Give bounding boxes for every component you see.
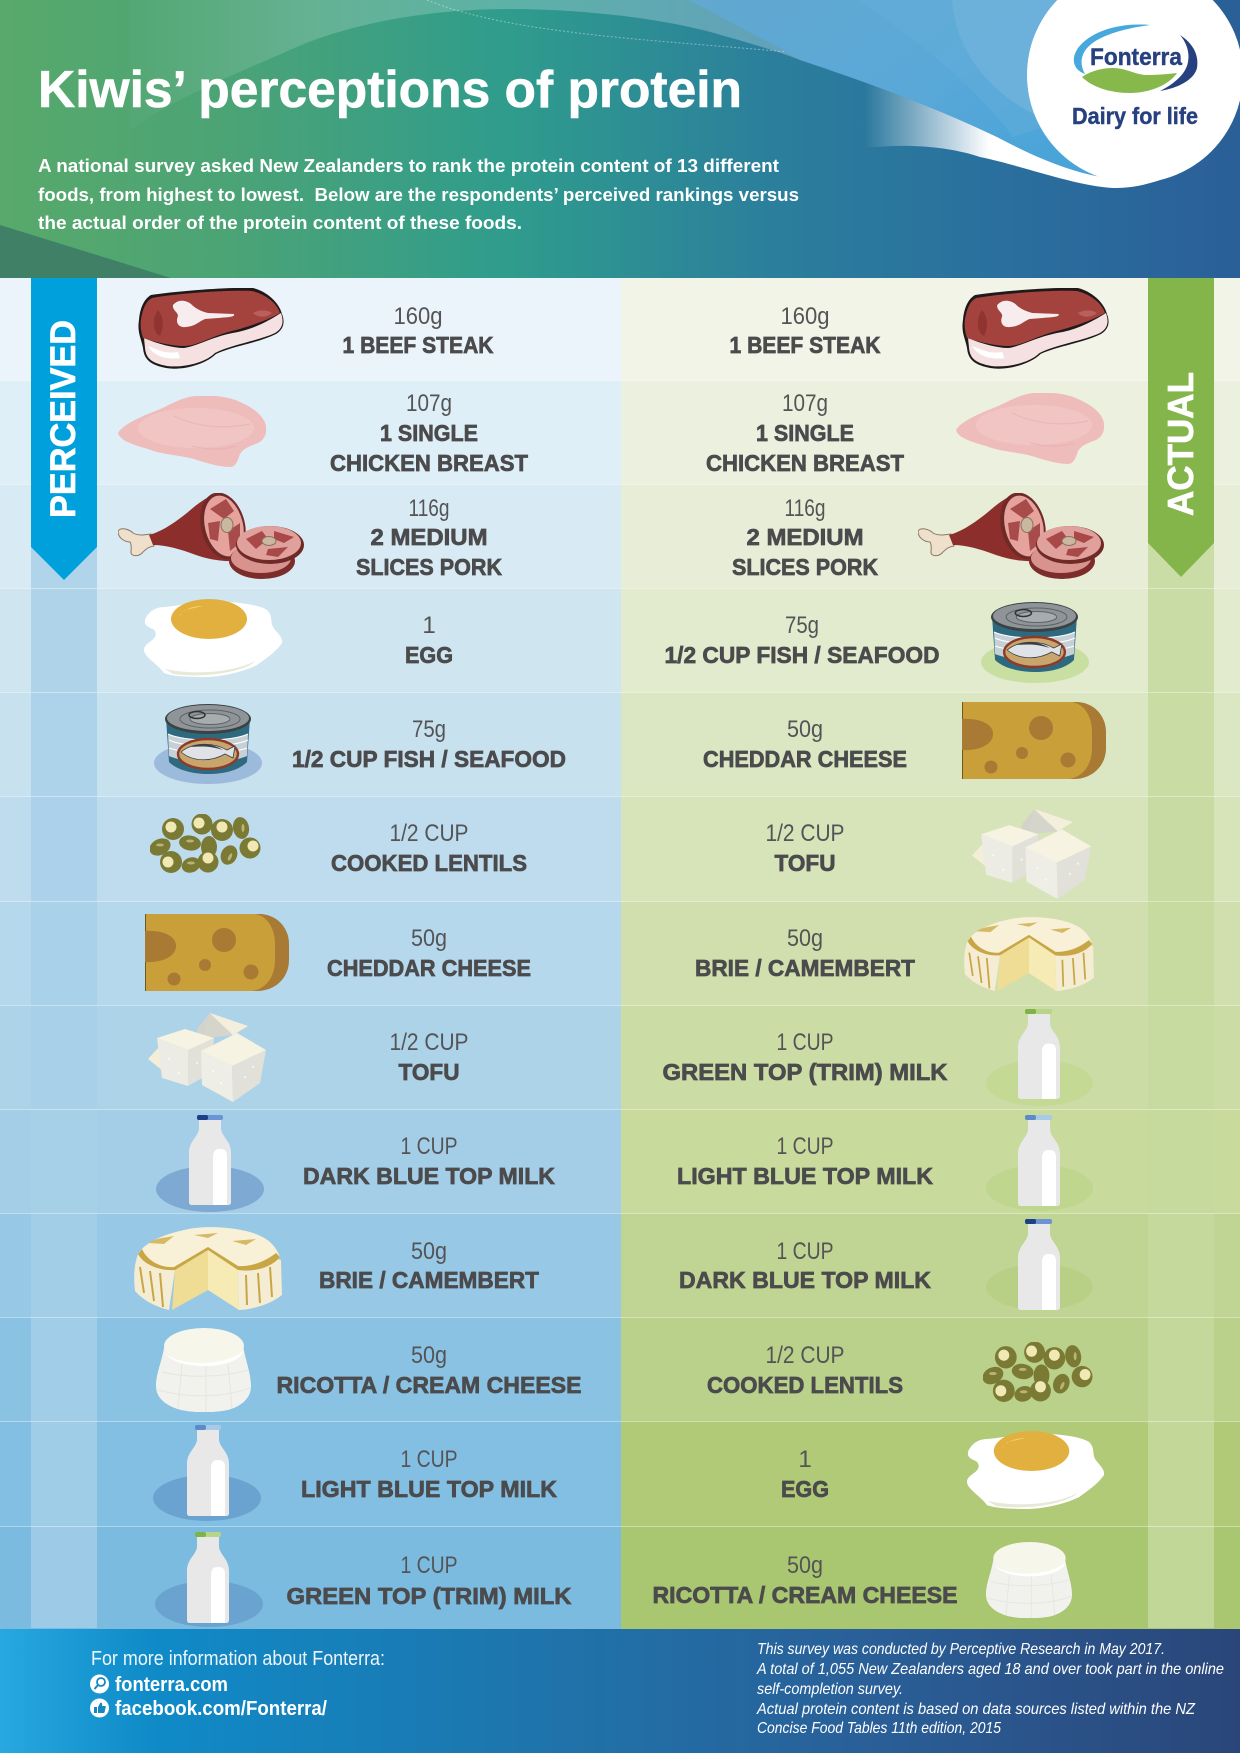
footer: survey notes: This survey was conducted by Perceptive Research in May 2017. <box>757 1641 1165 1658</box>
actual 4: fish: 1/2 CUP FISH / SEAFOOD <box>664 642 940 668</box>
actual 3: pork: 116g <box>784 495 826 522</box>
perceived 4: egg <box>144 599 453 677</box>
banner: perceived <box>31 278 97 580</box>
perceived 3: pork: 116g <box>408 495 450 522</box>
perceived 10: brie: 50g <box>411 1238 447 1265</box>
banner: perceived: PERCEIVED <box>44 320 83 518</box>
perceived 11: ricotta <box>156 1328 582 1412</box>
perceived 13: green top milk <box>155 1532 572 1627</box>
logo tagline: Dairy for life <box>1072 103 1198 129</box>
perceived 5: fish: 75g <box>412 716 446 743</box>
footer: contact info: fonterra.com <box>115 1674 228 1696</box>
panel: perceived ranking <box>118 288 582 1627</box>
perceived 6: lentils: 1/2 CUP <box>390 820 468 847</box>
actual 12: egg <box>781 1431 1104 1509</box>
actual 6: tofu: TOFU <box>774 850 836 876</box>
footer: survey notes <box>756 1641 1224 1737</box>
perceived 12: light blue top milk <box>153 1425 557 1521</box>
perceived 2: chicken breast: 1 SINGLE <box>380 420 478 446</box>
intro paragraph: foods, from highest to lowest. Below are the respondents’ perceived rankings versus <box>38 184 799 205</box>
intro paragraph: the actual order of the protein content of these foods. <box>38 212 522 233</box>
perceived 6: lentils <box>147 814 527 876</box>
perceived 4: egg: 1 <box>422 612 436 639</box>
actual 5: cheddar: CHEDDAR CHEESE <box>703 746 907 772</box>
actual 1: beef steak: 160g <box>780 303 830 330</box>
actual 3: pork <box>732 488 1104 580</box>
perceived 12: light blue top milk: 1 CUP <box>400 1446 458 1473</box>
actual 11: lentils: COOKED LENTILS <box>707 1372 903 1398</box>
actual 1: beef steak <box>730 288 1109 369</box>
perceived 5: fish <box>154 704 566 784</box>
actual 2: chicken breast <box>706 390 1104 476</box>
footer: survey notes: Actual protein content is based on data sources listed within the NZ <box>756 1701 1196 1718</box>
perceived 6: lentils: COOKED LENTILS <box>331 850 527 876</box>
perceived 9: dark blue top milk: DARK BLUE TOP MILK <box>303 1163 555 1189</box>
perceived 12: light blue top milk: LIGHT BLUE TOP MILK <box>301 1476 557 1502</box>
perceived 1: beef steak: 160g <box>394 303 442 330</box>
actual 3: pork: SLICES PORK <box>732 554 878 580</box>
actual 6: tofu <box>766 809 1091 899</box>
actual 9: light blue top milk: LIGHT BLUE TOP MILK <box>677 1163 933 1189</box>
perceived 3: pork: 2 MEDIUM <box>370 524 488 550</box>
icon: search <box>90 1674 109 1694</box>
footer: contact info <box>90 1648 385 1720</box>
panel: actual ranking <box>652 288 1109 1618</box>
actual 11: lentils <box>707 1341 1093 1404</box>
footer: survey notes: self-completion survey. <box>757 1681 903 1698</box>
perceived 9: dark blue top milk <box>156 1115 555 1212</box>
actual 12: egg: 1 <box>798 1446 812 1473</box>
actual 5: cheddar <box>703 702 1106 779</box>
logo: Fonterra emblem <box>1074 24 1197 93</box>
perceived 4: egg: EGG <box>405 642 453 668</box>
perceived 8: tofu: TOFU <box>398 1059 460 1085</box>
perceived 1: beef steak: 1 BEEF STEAK <box>342 332 494 358</box>
actual 13: ricotta: 50g <box>787 1552 823 1579</box>
actual 7: brie: 50g <box>787 925 823 952</box>
actual 4: fish <box>664 602 1089 683</box>
intro paragraph: A national survey asked New Zealanders to rank the protein content of 13 different <box>38 155 779 176</box>
actual 2: chicken breast: 107g <box>782 390 828 417</box>
perceived 8: tofu <box>148 1013 468 1102</box>
perceived 2: chicken breast: 107g <box>406 390 452 417</box>
actual 10: dark blue top milk: DARK BLUE TOP MILK <box>679 1267 931 1293</box>
actual 9: light blue top milk <box>677 1115 1093 1211</box>
actual 2: chicken breast: 1 SINGLE <box>756 420 854 446</box>
perceived 10: brie: BRIE / CAMEMBERT <box>319 1267 539 1293</box>
banner: actual <box>1148 278 1214 577</box>
perceived 11: ricotta: RICOTTA / CREAM CHEESE <box>276 1372 582 1398</box>
actual 8: green top milk: 1 CUP <box>776 1029 834 1056</box>
actual 7: brie <box>695 917 1094 991</box>
perceived 7: cheddar: CHEDDAR CHEESE <box>327 955 531 981</box>
perceived 13: green top milk: 1 CUP <box>400 1552 458 1579</box>
banner: actual: ACTUAL <box>1160 372 1201 516</box>
row backgrounds <box>0 278 1240 1629</box>
actual 8: green top milk: GREEN TOP (TRIM) MILK <box>662 1059 948 1085</box>
actual 9: light blue top milk: 1 CUP <box>776 1133 834 1160</box>
perceived 10: brie <box>134 1227 539 1310</box>
perceived 3: pork <box>118 488 502 580</box>
header banner <box>0 0 1240 278</box>
actual 13: ricotta: RICOTTA / CREAM CHEESE <box>652 1582 958 1608</box>
actual 11: lentils: 1/2 CUP <box>766 1342 844 1369</box>
actual 10: dark blue top milk <box>679 1219 1093 1310</box>
logo badge <box>1027 0 1240 183</box>
actual 10: dark blue top milk: 1 CUP <box>776 1238 834 1265</box>
perceived 2: chicken breast: CHICKEN BREAST <box>330 450 528 476</box>
footer: contact info: For more information about Fonterra: <box>91 1648 385 1670</box>
footer: survey notes: Concise Food Tables 11th edition, 2015 <box>757 1720 1001 1737</box>
footer: contact info: facebook.com/Fonterra/ <box>115 1698 327 1720</box>
icon: facebook like <box>90 1698 109 1718</box>
perceived 8: tofu: 1/2 CUP <box>390 1029 468 1056</box>
footer <box>0 1629 1240 1753</box>
actual 13: ricotta <box>652 1542 1072 1618</box>
perceived 5: fish: 1/2 CUP FISH / SEAFOOD <box>292 746 566 772</box>
actual 4: fish: 75g <box>785 612 819 639</box>
perceived 9: dark blue top milk: 1 CUP <box>400 1133 458 1160</box>
actual 2: chicken breast: CHICKEN BREAST <box>706 450 904 476</box>
actual 1: beef steak: 1 BEEF STEAK <box>730 332 881 358</box>
actual 12: egg: EGG <box>781 1476 829 1502</box>
actual 5: cheddar: 50g <box>787 716 823 743</box>
actual 7: brie: BRIE / CAMEMBERT <box>695 955 915 981</box>
perceived 7: cheddar: 50g <box>411 925 447 952</box>
perceived 1: beef steak <box>138 288 494 369</box>
perceived 13: green top milk: GREEN TOP (TRIM) MILK <box>286 1583 572 1609</box>
logo: Fonterra emblem: Fonterra <box>1090 44 1183 71</box>
actual 6: tofu: 1/2 CUP <box>766 820 844 847</box>
perceived 2: chicken breast <box>118 390 528 476</box>
actual 8: green top milk <box>662 1009 1093 1106</box>
perceived 3: pork: SLICES PORK <box>356 554 502 580</box>
intro paragraph <box>38 155 799 233</box>
perceived 7: cheddar <box>145 914 531 991</box>
perceived 11: ricotta: 50g <box>411 1342 447 1369</box>
actual 3: pork: 2 MEDIUM <box>746 524 864 550</box>
title: Kiwis’ perceptions of protein <box>38 61 742 119</box>
